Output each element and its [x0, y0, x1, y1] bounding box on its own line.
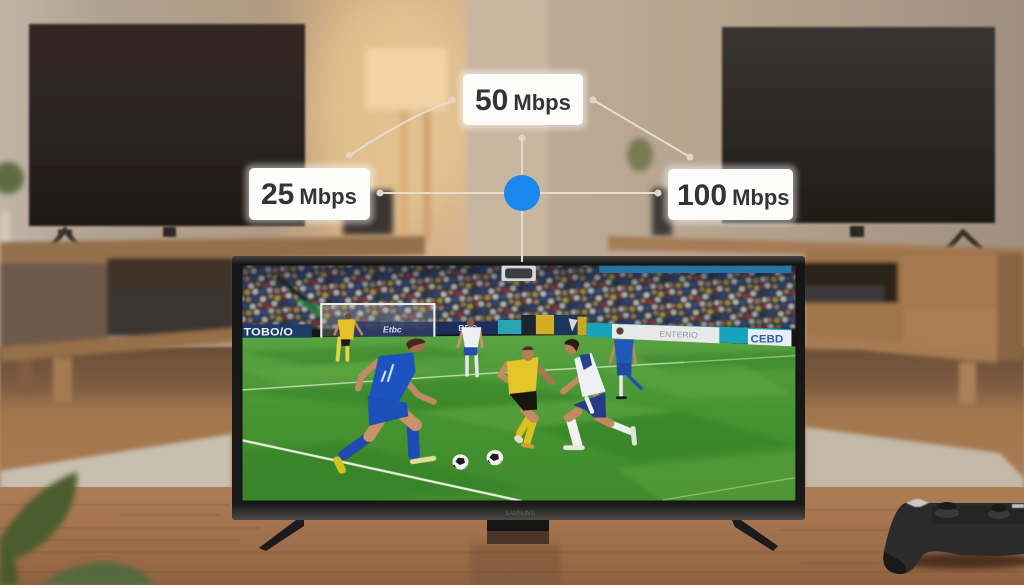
rug — [0, 427, 1024, 490]
TV bezel — [232, 256, 805, 520]
right wall TV — [722, 27, 995, 250]
advertising boards: ENTERIO — [659, 329, 699, 340]
goal: Etbc — [383, 325, 402, 334]
advertising boards: TOBO/O — [244, 325, 293, 339]
goal — [321, 304, 434, 338]
blue player distant — [610, 327, 641, 398]
pitch lines — [242, 356, 795, 501]
shelf plant — [627, 138, 672, 236]
label: 50 Mbps: 50Mbps — [475, 84, 571, 117]
yellow player distant — [335, 313, 362, 360]
advertising boards: BBC — [458, 323, 477, 333]
central blue node — [504, 175, 540, 211]
stadium crowd — [239, 262, 799, 328]
connector end dots — [346, 96, 694, 196]
football match on screen — [239, 262, 799, 501]
white player distant — [458, 320, 482, 376]
wooden table — [0, 487, 1024, 585]
yellow and black player — [500, 346, 552, 447]
thumbsticks — [935, 502, 1010, 519]
screen edge — [242, 265, 797, 501]
left console — [0, 236, 425, 402]
main TV — [232, 256, 805, 551]
mowing stripes — [245, 345, 795, 474]
foreground plant leaves — [0, 472, 150, 585]
label: 100 Mbps — [664, 165, 797, 224]
soccer balls — [452, 450, 503, 470]
label: 25 Mbps: 25Mbps — [261, 178, 357, 211]
left plant — [0, 162, 24, 252]
advertising boards — [242, 315, 791, 346]
connector lines — [349, 100, 690, 262]
floor lamp — [365, 48, 447, 240]
right console — [608, 236, 1024, 404]
speed tier diagram — [245, 70, 797, 262]
lamp glow — [310, 0, 480, 230]
left wall TV — [29, 24, 305, 249]
advertising boards: CEBD — [750, 334, 783, 345]
brand mark: SAMSUNG — [505, 511, 535, 517]
label: 100 Mbps: 100Mbps — [677, 179, 790, 212]
pitch — [242, 335, 795, 501]
d-pad buttons — [906, 499, 929, 507]
white and navy player — [563, 339, 634, 448]
player number 11 in blue — [337, 338, 434, 470]
wall pillar — [467, 0, 545, 260]
TV stand — [259, 520, 778, 551]
floor — [0, 347, 1024, 490]
game controller — [883, 499, 1024, 574]
label: 25 Mbps — [245, 164, 374, 224]
small speaker left — [343, 190, 393, 235]
label: 50 Mbps — [459, 70, 587, 129]
